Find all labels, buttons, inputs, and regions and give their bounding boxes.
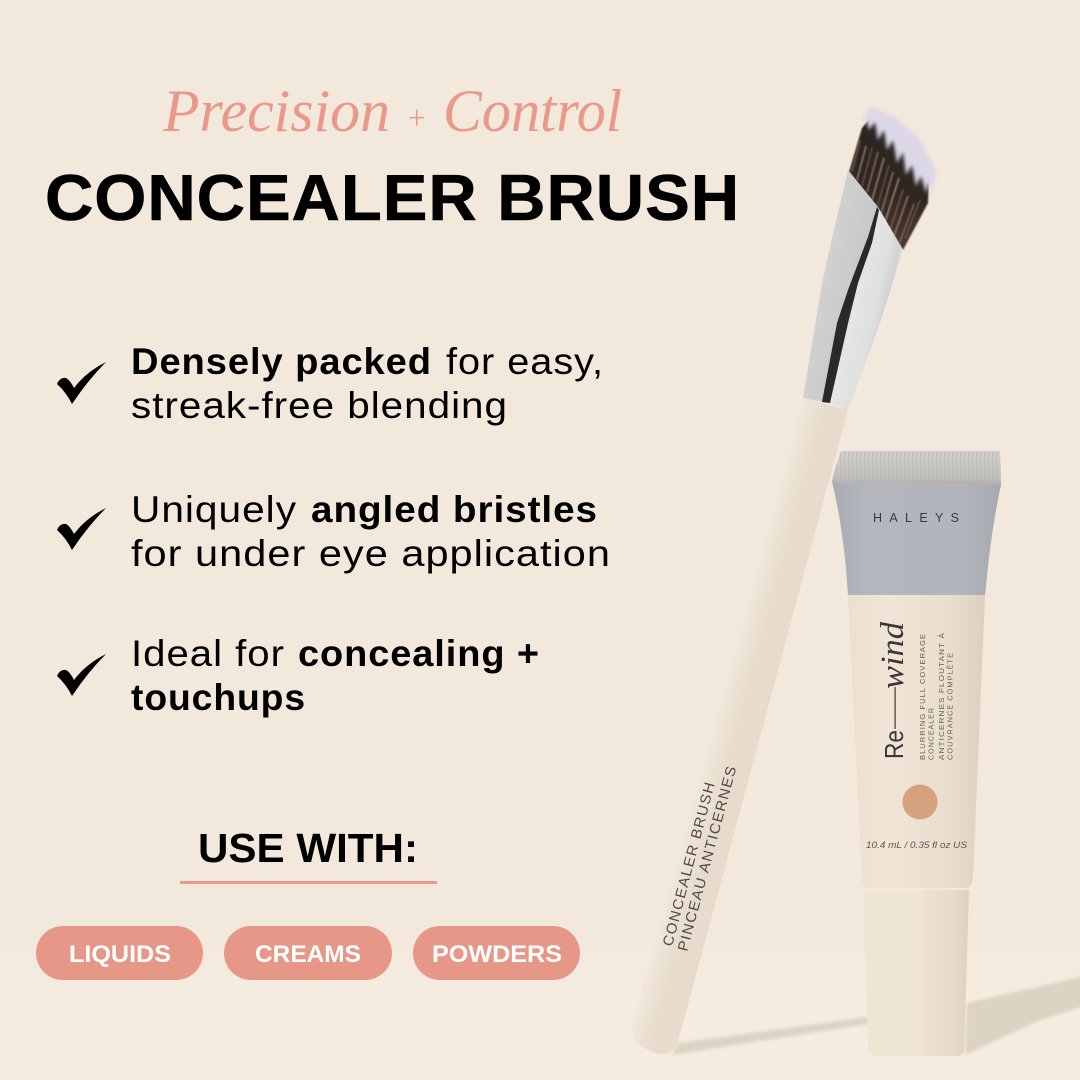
product description: COUVRANCE COMPLÈTE xyxy=(946,652,954,760)
icon: check mark xyxy=(57,362,106,404)
pill: liquids xyxy=(36,926,203,980)
concealer tube xyxy=(832,451,1001,1056)
product name: Re-wind xyxy=(875,621,911,759)
title: script heading: + xyxy=(406,100,427,137)
text: benefit 1 line 1 regular: for easy, xyxy=(446,341,604,382)
tube crimp xyxy=(832,451,1001,485)
pill: creams: CREAMS xyxy=(255,941,361,968)
title: script heading xyxy=(162,78,622,144)
handle text: PINCEAU ANTICERNES xyxy=(675,763,741,953)
icon: check mark xyxy=(57,654,106,696)
concealer brush xyxy=(632,107,936,1054)
pill: powders: POWDERS xyxy=(432,941,562,968)
product description: ANTICERNES FLOUTANT À xyxy=(937,632,946,760)
text: benefit 3 line 1 bold: concealing + xyxy=(298,633,540,674)
bristle tips xyxy=(860,107,936,193)
text: benefit 3 line 1 regular: Ideal for xyxy=(131,633,285,674)
icon: check mark xyxy=(57,508,106,550)
handle text: CONCEALER BRUSH xyxy=(660,780,719,948)
product name: Re-wind: wind xyxy=(875,621,911,689)
product description: BLURRING FULL COVERAGE xyxy=(918,633,927,760)
brand name: HALEYS xyxy=(873,511,959,525)
product description: CONCEALER xyxy=(926,707,936,760)
benefit 2 xyxy=(57,489,611,574)
shadows on floor xyxy=(672,976,1080,1055)
volume text: 10.4 mL / 0.35 fl oz US xyxy=(866,840,968,851)
tube cap xyxy=(863,890,969,1056)
heading: use with: USE WITH: xyxy=(198,825,418,871)
pill: creams xyxy=(224,926,392,980)
pill: powders xyxy=(413,926,580,980)
shade swatch xyxy=(902,784,938,820)
tube grey shoulder xyxy=(832,482,1001,596)
text: benefit 1 line 2: streak-free blending xyxy=(131,385,508,426)
text: benefit 2 line 2: for under eye application xyxy=(131,533,611,574)
metal ferrule xyxy=(803,170,903,410)
benefit 3 xyxy=(57,633,540,718)
brush handle xyxy=(632,398,848,1054)
bristles xyxy=(849,107,936,250)
pill: liquids: LIQUIDS xyxy=(69,941,171,968)
benefit 1 xyxy=(57,341,604,426)
text: benefit 2 line 1 regular: Uniquely xyxy=(131,489,297,530)
text: benefit 2 line 1 bold: angled bristles xyxy=(311,489,598,530)
text: benefit 3 line 2: touchups xyxy=(131,677,306,718)
text: benefit 1 line 1 bold: Densely packed xyxy=(131,341,432,382)
tube cream body xyxy=(848,595,985,888)
product name: Re-wind: Re xyxy=(879,730,909,759)
title: script heading: Control xyxy=(443,78,622,144)
title: script heading: Precision xyxy=(162,78,390,144)
underline xyxy=(180,881,437,884)
title: main heading: CONCEALER BRUSH xyxy=(45,161,740,234)
product description xyxy=(918,632,954,760)
